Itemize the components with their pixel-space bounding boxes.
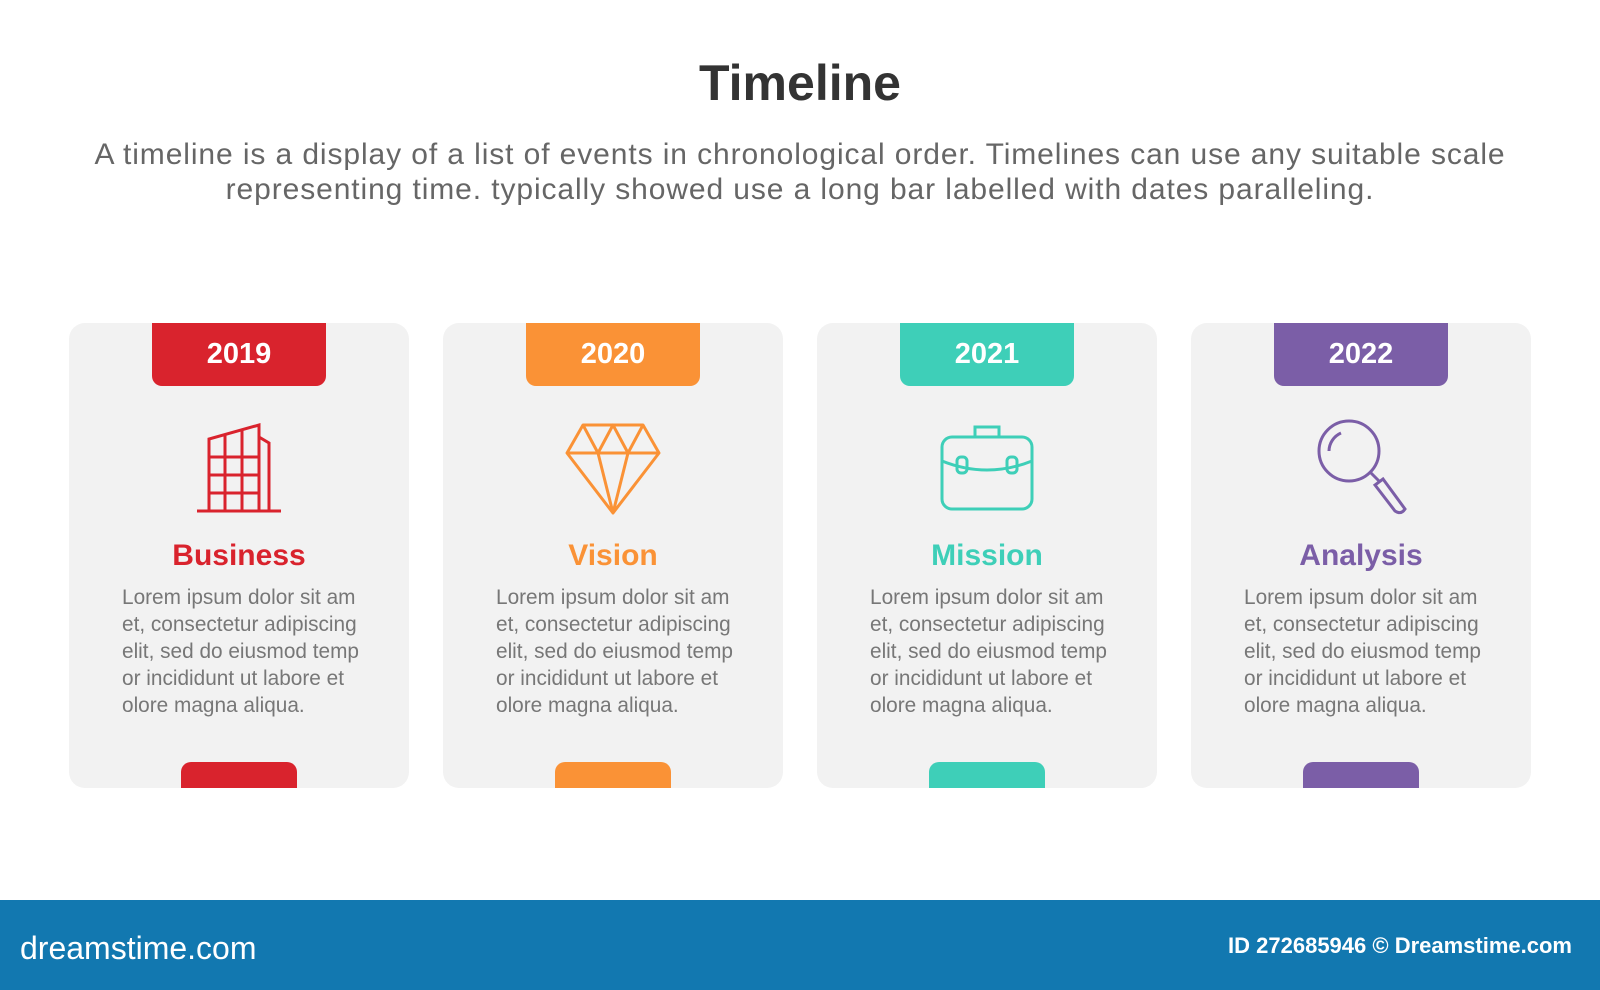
year tab	[1274, 323, 1448, 386]
body text: or incididunt ut labore et	[496, 667, 718, 690]
body text: or incididunt ut labore et	[122, 667, 344, 690]
heading: Business	[172, 539, 306, 572]
subtitle	[94, 138, 1505, 206]
subtitle: representing time. typically showed use a long bar labelled with dates paralleling.	[226, 173, 1374, 206]
bottom tab	[181, 762, 297, 788]
body text: elit, sed do eiusmod temp	[870, 640, 1107, 663]
footer logo text: dreamstime.com	[20, 930, 256, 966]
year tab: 2019	[207, 338, 271, 370]
heading: Analysis	[1299, 539, 1423, 572]
body text: Lorem ipsum dolor sit am	[122, 586, 355, 609]
bottom tab	[929, 762, 1045, 788]
footer bar	[0, 900, 1600, 990]
bottom tab	[1303, 762, 1419, 788]
icon: diamond	[566, 423, 660, 515]
title: Timeline	[699, 55, 901, 111]
body text	[496, 586, 733, 717]
body text: et, consectetur adipiscing	[870, 613, 1105, 636]
year tab	[900, 323, 1074, 386]
year tab: 2021	[955, 338, 1019, 370]
heading: Mission	[931, 539, 1043, 572]
body text: Lorem ipsum dolor sit am	[870, 586, 1103, 609]
subtitle: A timeline is a display of a list of events in chronological order. Timelines can use any suitable scale	[95, 138, 1505, 171]
body text	[122, 586, 359, 717]
year tab: 2020	[581, 338, 645, 370]
heading: Vision	[568, 539, 658, 572]
body text: et, consectetur adipiscing	[496, 613, 731, 636]
year tab	[152, 323, 326, 386]
body text: elit, sed do eiusmod temp	[1244, 640, 1481, 663]
body text: elit, sed do eiusmod temp	[496, 640, 733, 663]
year tab: 2022	[1329, 338, 1393, 370]
body text: olore magna aliqua.	[122, 694, 305, 717]
footer id text: ID 272685946 © Dreamstime.com	[1228, 933, 1572, 958]
body text: or incididunt ut labore et	[1244, 667, 1466, 690]
icon: building	[197, 423, 281, 512]
body text: or incididunt ut labore et	[870, 667, 1092, 690]
icon: briefcase	[940, 426, 1034, 510]
body text: et, consectetur adipiscing	[122, 613, 357, 636]
year tab	[526, 323, 700, 386]
panel: 2022 analysis	[1191, 323, 1531, 788]
panel: 2019 business	[69, 323, 409, 788]
body text: Lorem ipsum dolor sit am	[496, 586, 729, 609]
bottom tab	[555, 762, 671, 788]
body text: Lorem ipsum dolor sit am	[1244, 586, 1477, 609]
body text: et, consectetur adipiscing	[1244, 613, 1479, 636]
body text: olore magna aliqua.	[1244, 694, 1427, 717]
body text	[870, 586, 1107, 717]
panel: 2020 vision	[443, 323, 783, 788]
body text: olore magna aliqua.	[496, 694, 679, 717]
panel: 2021 mission	[817, 323, 1157, 788]
body text: olore magna aliqua.	[870, 694, 1053, 717]
body text: elit, sed do eiusmod temp	[122, 640, 359, 663]
body text	[1244, 586, 1481, 717]
icon: magnifier	[1318, 420, 1407, 514]
